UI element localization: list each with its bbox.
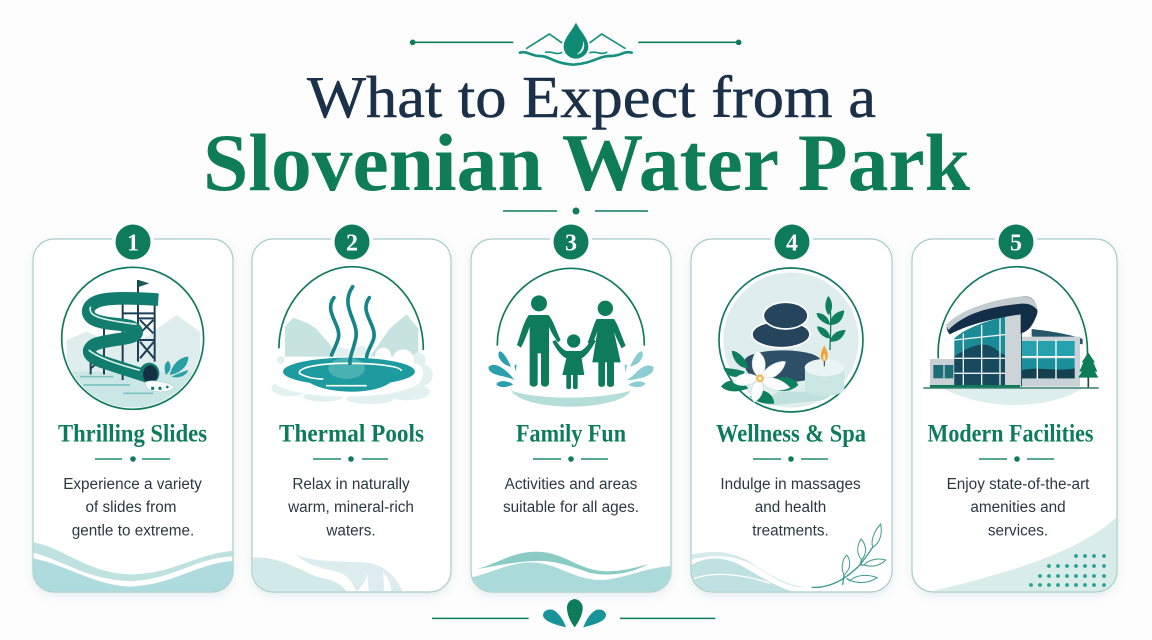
title line 1: What to Expect from a bbox=[307, 64, 876, 130]
divider bbox=[979, 456, 1054, 462]
description: Indulge in massages bbox=[720, 476, 861, 493]
heading: Wellness & Spa bbox=[716, 420, 866, 448]
number badge 4 bbox=[771, 224, 813, 260]
description bbox=[63, 476, 202, 540]
panel: thrilling slides bbox=[30, 224, 233, 593]
icon: modern building bbox=[923, 267, 1099, 405]
description: Relax in naturally bbox=[292, 476, 410, 493]
divider bbox=[313, 456, 388, 462]
heading: Thermal Pools bbox=[279, 420, 424, 448]
number badge 5 bbox=[995, 224, 1037, 260]
description: treatments. bbox=[752, 522, 829, 540]
number badge 3: 3 bbox=[565, 230, 577, 256]
title line 2: Slovenian Water Park bbox=[203, 117, 970, 208]
description: amenities and bbox=[970, 499, 1066, 516]
number badge 4: 4 bbox=[786, 230, 798, 256]
number badge 3 bbox=[550, 224, 592, 260]
title divider bbox=[503, 208, 648, 214]
panel: wellness and spa bbox=[690, 224, 892, 592]
heading: Thrilling Slides bbox=[58, 420, 207, 448]
description: waters. bbox=[325, 522, 376, 540]
description: Experience a variety bbox=[63, 476, 202, 493]
description bbox=[503, 476, 639, 516]
description: gentle to extreme. bbox=[72, 522, 194, 540]
description: suitable for all ages. bbox=[503, 499, 639, 516]
description: Enjoy state-of-the-art bbox=[947, 476, 1090, 493]
panel: family fun bbox=[470, 224, 673, 593]
number badge 2 bbox=[331, 224, 373, 260]
header emblem: water drop, mountains and waves bbox=[410, 23, 741, 65]
footer ornament: three droplets bbox=[432, 599, 715, 627]
description bbox=[720, 476, 861, 540]
description: of slides from bbox=[86, 499, 176, 516]
divider bbox=[533, 456, 608, 462]
panel: modern facilities bbox=[912, 224, 1117, 592]
panel: thermal pools bbox=[250, 224, 451, 592]
number badge 2: 2 bbox=[346, 230, 358, 256]
description: services. bbox=[988, 522, 1048, 540]
divider bbox=[753, 456, 828, 462]
icon: steaming thermal pool bbox=[272, 267, 433, 404]
bottom wave and leaf sprig bbox=[690, 524, 886, 592]
divider bbox=[95, 456, 170, 462]
number badge 5: 5 bbox=[1010, 230, 1022, 256]
bottom wave and dots bbox=[928, 517, 1117, 592]
description bbox=[287, 476, 414, 540]
icon: spa stones, flower and candle bbox=[719, 268, 863, 412]
heading: Family Fun bbox=[516, 420, 626, 448]
description: and health bbox=[755, 499, 826, 516]
bottom wave bbox=[250, 552, 403, 592]
heading: Modern Facilities bbox=[928, 420, 1094, 448]
description bbox=[947, 476, 1090, 540]
description: warm, mineral-rich bbox=[287, 499, 414, 516]
bottom wave bbox=[30, 542, 233, 593]
icon: family holding hands bbox=[488, 268, 654, 407]
bottom wave bbox=[470, 552, 673, 593]
icon: water slide bbox=[62, 267, 204, 412]
number badge 1 bbox=[112, 224, 154, 260]
number badge 1: 1 bbox=[127, 230, 139, 256]
description: Activities and areas bbox=[505, 476, 638, 493]
